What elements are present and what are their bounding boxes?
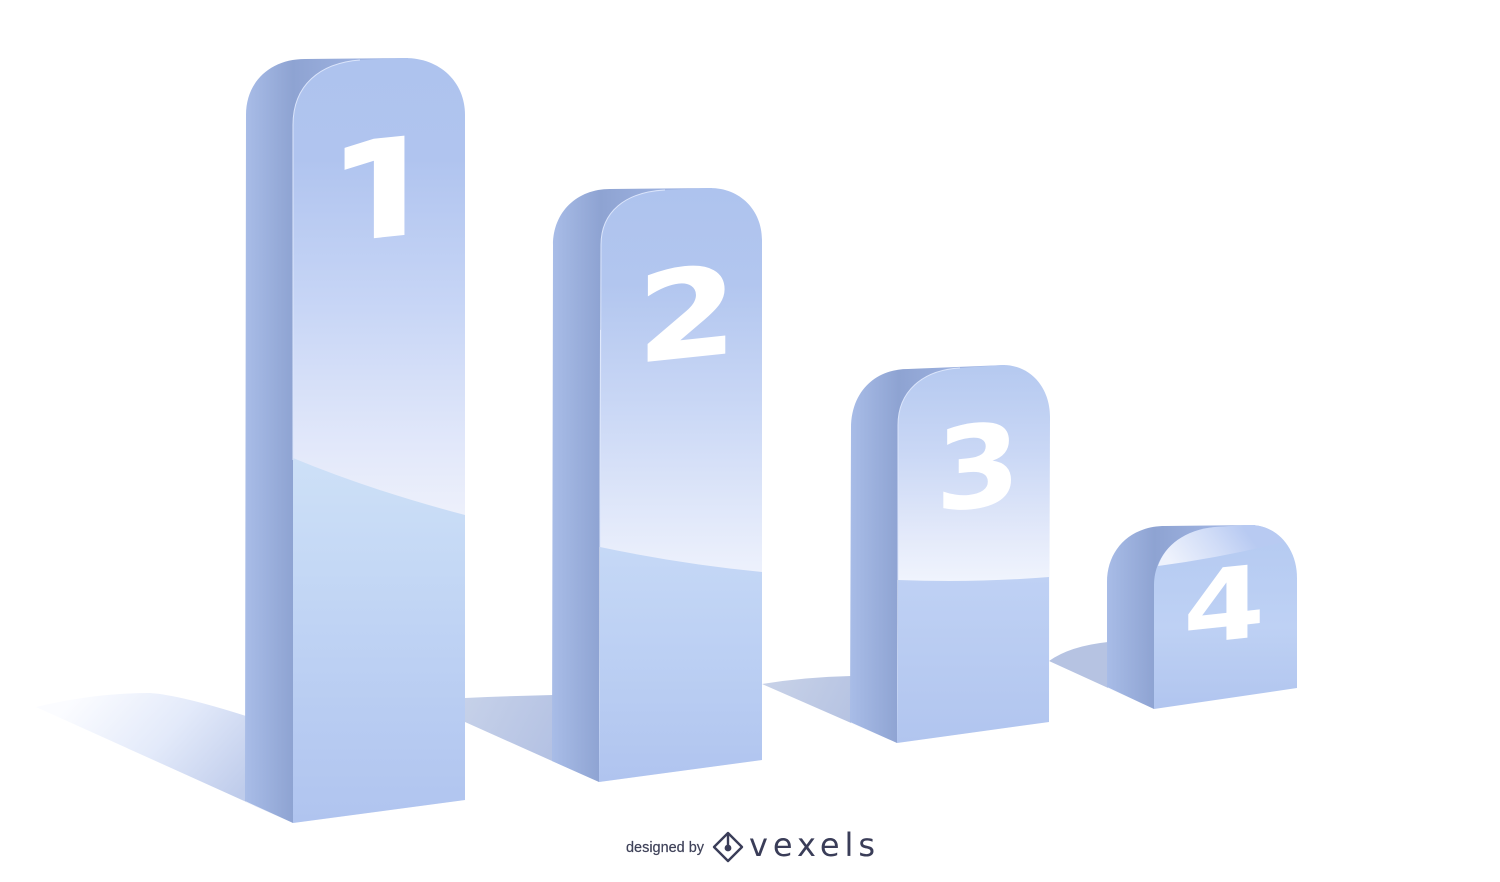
bar 4 side face [1107, 525, 1255, 709]
bar 2 side face [552, 188, 712, 782]
shadow: bar 3 [762, 676, 897, 743]
bar 2 front face lower reflection [599, 547, 762, 782]
shadow: bar 2 [465, 695, 599, 782]
bar 2 number: 2 [637, 239, 737, 391]
shadow: bar 4 [1049, 642, 1154, 709]
bar 3 side face [850, 365, 1005, 743]
infographic: four descending 3D bars [74, 58, 1297, 862]
watermark: designed by vexels [626, 826, 875, 864]
designed by label: designed by [626, 839, 704, 856]
bar 1 side face [245, 58, 408, 823]
bar 3 front face lower reflection [897, 577, 1049, 743]
bar 2 edge highlight [600, 190, 665, 547]
bar 4 top gloss [1158, 525, 1284, 566]
bar 3 edge highlight [898, 368, 960, 580]
bar 4 [1107, 525, 1297, 709]
bar 4 number: 4 [1183, 543, 1265, 668]
bar 3 front face upper [897, 365, 1050, 743]
shadow: bar 1 [36, 693, 293, 823]
vexels wordmark: vexels [749, 826, 875, 864]
bar 4 front face [1154, 525, 1297, 709]
icon: vexels diamond [714, 833, 742, 861]
bar 1 front face lower reflection [293, 458, 465, 823]
bar 3 number: 3 [935, 398, 1021, 539]
bar 1 number: 1 [325, 97, 445, 310]
bar 1 [245, 58, 465, 823]
bar 3 [850, 365, 1050, 743]
bar 1 edge highlight [293, 60, 360, 460]
bar 2 front face upper [599, 188, 762, 782]
bar 1 front face upper [293, 58, 465, 823]
bar 2 [552, 188, 762, 782]
